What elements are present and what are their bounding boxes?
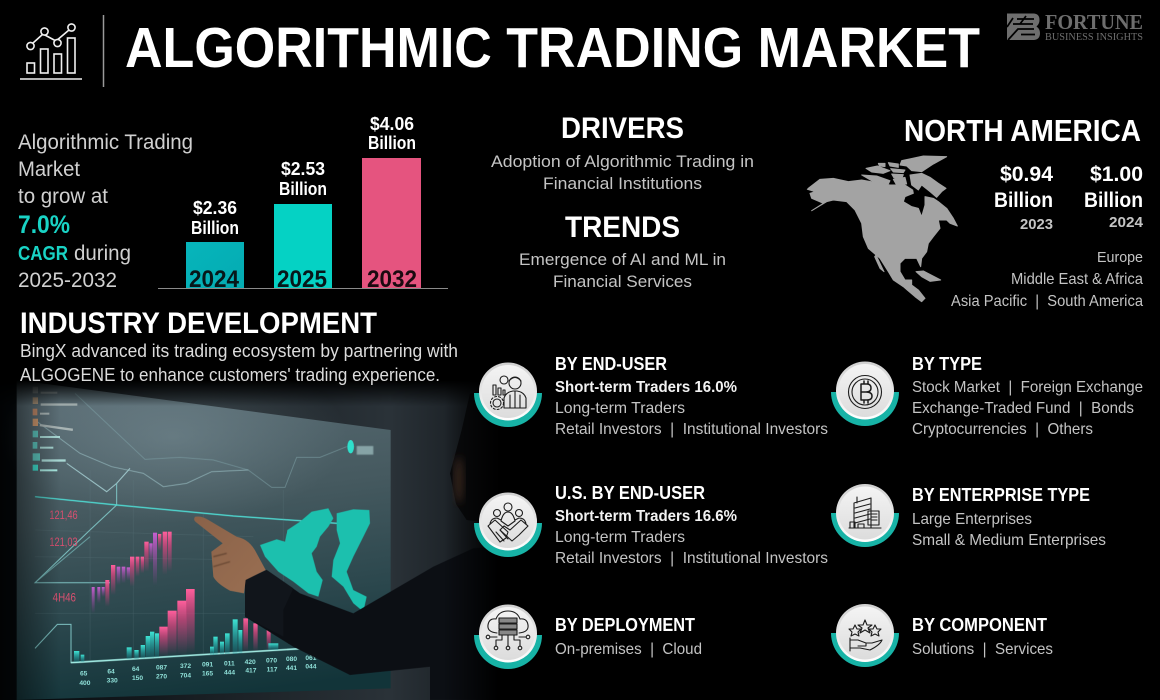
north america heading: NORTH AMERICA [904,113,1141,148]
text: by component [912,615,1053,658]
text: by type: Exchange-Traded Fund | Bonds [912,400,1134,417]
trader head [450,398,478,521]
bar chart: market size: $4.06 [370,114,414,134]
pink and purple bars on screen [92,532,172,614]
industry development: BingX advanced its trading ecosystem by partnering with [20,341,458,361]
logo: Fortune Business Insights: FORTUNE [1045,10,1143,34]
trader hand [194,516,266,593]
growth statement: CAGR [18,243,68,265]
north america values: 2024 [1109,214,1144,231]
axis figures on screen: 400 [79,680,91,687]
icon: trader with chart and gear [474,362,542,427]
growth statement: to grow at [18,185,108,208]
trends: TRENDS [565,211,680,244]
bar chart: market size: $2.36 [193,198,237,218]
icon: cloud server [474,604,542,669]
north america values: $0.94 [1000,163,1053,186]
text: by end-user: Long-term Traders [555,400,685,417]
axis figures on screen: 441 [286,665,297,672]
axis figures on screen: 061 [305,655,317,662]
bar chart: market size: 2025 [277,266,327,293]
drivers: Adoption of Algorithmic Trading in [491,152,754,171]
axis figures on screen: 64 [107,668,115,675]
red screen figures: 4H46 [53,591,76,605]
axis figures on screen: 091 [202,662,213,669]
text: by type: Stock Market | Foreign Exchange [912,379,1143,396]
growth statement: Algorithmic Trading [18,131,193,154]
bar chart: market size: 2032 [367,266,417,293]
panel: by component [831,604,1053,667]
axis figures on screen: 011 [224,660,235,667]
text: by deployment: On-premises | Cloud [555,641,702,658]
axis figures on screen: 270 [156,674,167,681]
panel: u.s. by end-user [474,483,828,567]
growth statement: Market [18,158,80,181]
other regions [951,249,1143,310]
trends [519,211,726,291]
industry development: ALGOGENE to enhance customers' trading experience. [20,365,440,385]
text: by type [912,354,1143,438]
text: u.s. by end-user: Long-term Traders [555,529,685,546]
red screen figures: 121,46 [49,508,78,522]
axis figures on screen: 070 [266,658,277,665]
axis figures on screen [79,655,317,687]
other regions: Middle East & Africa [1011,271,1143,288]
other regions: Europe [1097,249,1143,266]
text: by component: BY COMPONENT [912,615,1047,635]
logo: Fortune Business Insights: BUSINESS INSIGHTS [1045,32,1143,43]
text: u.s. by end-user [555,483,828,567]
text: by enterprise type: BY ENTERPRISE TYPE [912,485,1090,505]
drivers: Financial Institutions [543,174,702,193]
growth statement [18,131,193,292]
text: by deployment: BY DEPLOYMENT [555,615,695,635]
bar chart: market size: 2024 [189,266,240,293]
photo: trader pointing at a market data screen [10,382,484,700]
text: by end-user: Short-term Traders 16.0% [555,379,737,396]
text: by type: BY TYPE [912,354,982,374]
axis figures on screen: 372 [180,663,191,670]
axis figures on screen: 330 [107,678,118,685]
trader arm [245,547,500,700]
text: u.s. by end-user: U.S. BY END-USER [555,483,705,503]
bar chart: market size [158,114,448,293]
icon: handshake and team [474,492,542,557]
icon: bitcoin coin [831,362,899,426]
axis figures on screen: 704 [180,672,191,679]
text: by enterprise type: Large Enterprises [912,511,1032,528]
bar chart: market size: $2.53 [281,159,325,179]
growth statement: 7.0% [18,211,70,239]
icon: office buildings [831,484,899,547]
trends: Emergence of AI and ML in [519,250,726,269]
north america values: Billion [1084,189,1143,212]
panel: by type [831,354,1143,438]
text: by end-user [555,354,828,438]
red screen figures: 121,03 [49,535,78,549]
north america values: 2023 [1020,216,1053,233]
drivers [491,112,754,193]
axis figures on screen: 044 [305,664,317,671]
legend ticks on screen [33,387,77,471]
title divider [102,15,104,87]
red screen figures [49,508,78,605]
axis figures on screen: 150 [132,675,143,682]
axis figures on screen: 117 [267,666,278,673]
trends: Financial Services [553,272,692,291]
growth statement: during [74,242,131,265]
text: by end-user: Retail Investors | Institutional Investors [555,421,828,438]
axis figures on screen: 080 [286,656,297,663]
other regions: Asia Pacific | South America [951,293,1143,310]
text: by end-user: BY END-USER [555,354,667,374]
axis figures on screen: 420 [245,659,256,666]
axis figures on screen: 444 [224,670,235,677]
text: u.s. by end-user: Short-term Traders 16.6% [555,508,737,525]
text: by component: Solutions | Services [912,641,1053,658]
logo: Fortune Business Insights [1007,10,1143,43]
icon: chart growth [20,24,82,79]
text: by type: Cryptocurrencies | Others [912,421,1093,438]
bar chart: market size: Billion [191,218,239,238]
north america values: Billion [994,189,1053,212]
panel: by deployment [474,604,702,669]
north america values: $1.00 [1090,163,1143,186]
world map on screen [260,508,370,612]
drivers: DRIVERS [561,112,684,145]
text: by enterprise type: Small & Medium Enterprises [912,532,1106,549]
text: u.s. by end-user: Retail Investors | Institutional Investors [555,550,828,567]
axis figures on screen: 417 [245,668,257,675]
panel: by enterprise type [831,484,1106,549]
bar chart: market size: Billion [368,133,416,153]
axis figures on screen: 087 [156,664,167,671]
north america values [994,163,1144,233]
title: ALGORITHMIC TRADING MARKET [125,16,980,80]
panel: by end-user [474,354,828,438]
axis figures on screen: 64 [132,666,140,673]
axis figures on screen: 65 [80,671,88,678]
text: by enterprise type [912,485,1106,549]
text: by deployment [555,615,702,658]
teal and pink bars on screen [74,589,278,662]
industry development: INDUSTRY DEVELOPMENT [20,307,377,340]
bar chart: market size: Billion [279,179,327,199]
axis figures on screen: 165 [202,670,213,677]
map: North America [807,156,957,302]
icon: hand with stars [831,604,899,667]
growth statement: 2025-2032 [18,269,117,292]
industry development [20,307,458,385]
